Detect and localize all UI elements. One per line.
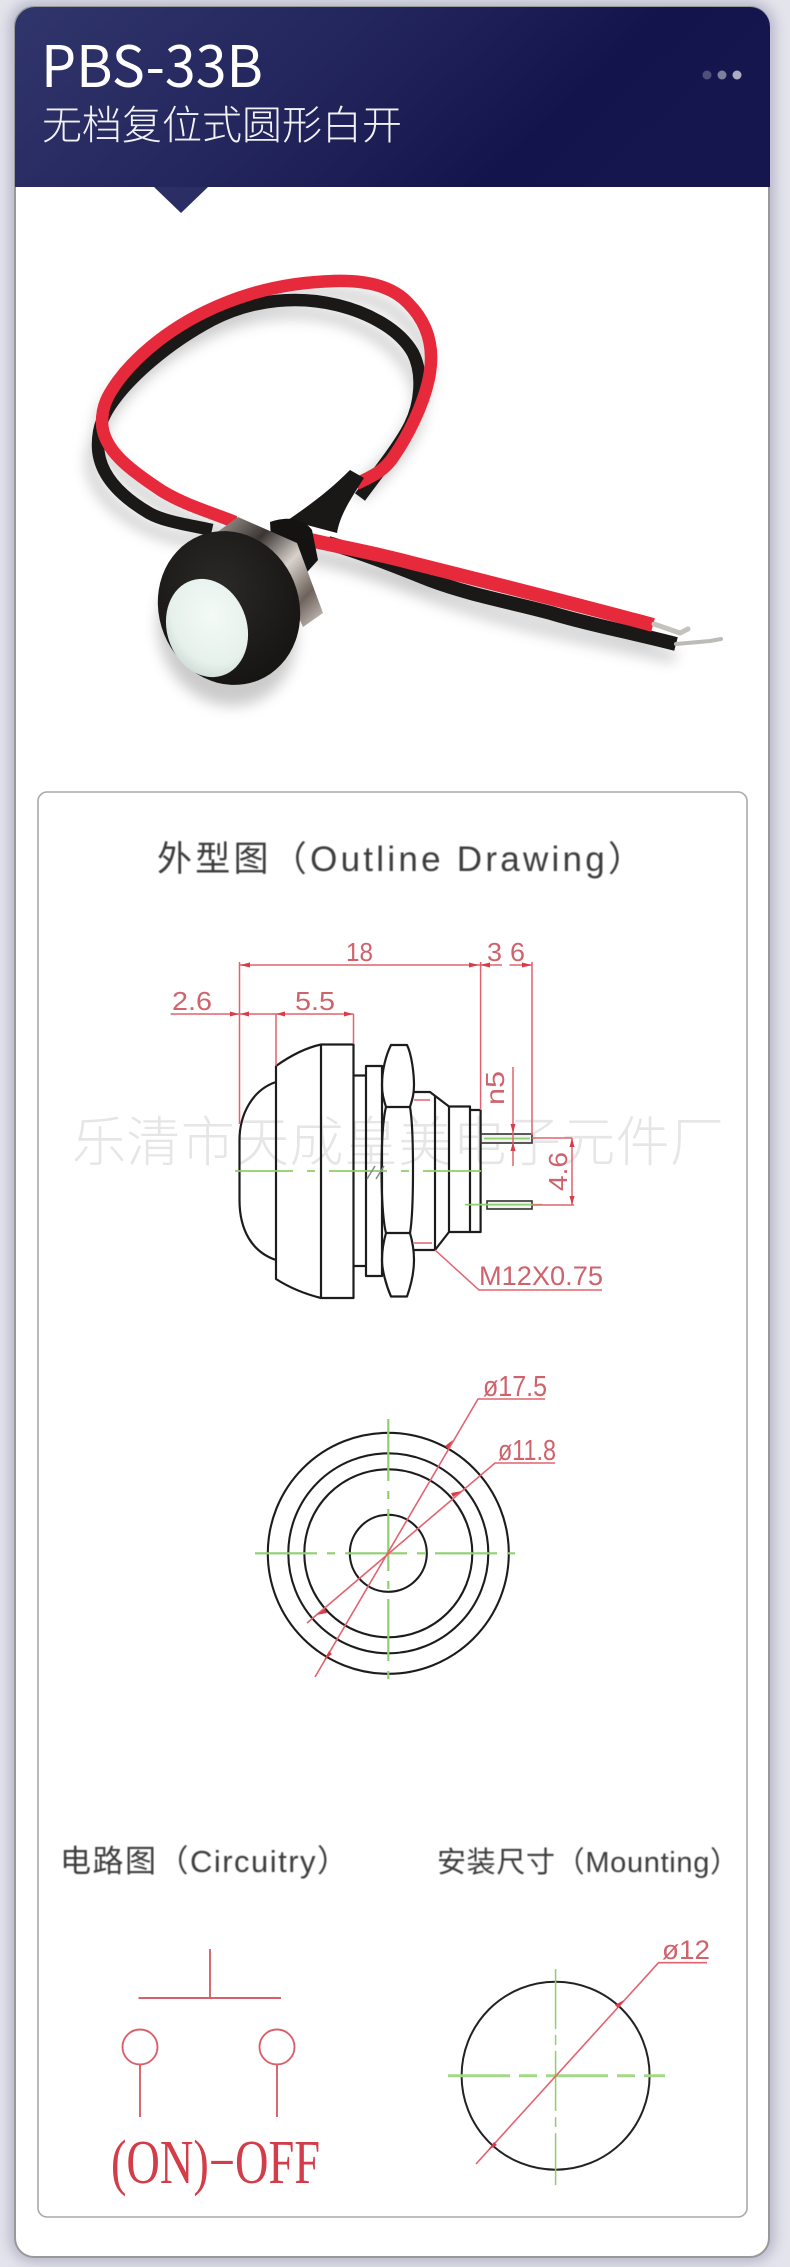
centre lines: [255, 1419, 522, 1689]
dimension labels: [172, 937, 603, 1291]
hex nut: [216, 517, 323, 627]
diameter leaders: [307, 1399, 555, 1677]
mounting hole drawing: [448, 1935, 710, 2185]
product photo: push button switch with red and black wires: [92, 281, 721, 727]
header pointer arrow: [154, 187, 208, 213]
title: PBS-33B: [41, 22, 263, 104]
diameter labels: ø17.5: [483, 1371, 547, 1403]
circuit symbol: [111, 1949, 320, 2197]
panel: technical drawings: [38, 792, 747, 2217]
wire shadow: [92, 293, 671, 727]
leader arrows: [316, 1440, 462, 1660]
dimension labels: 3: [487, 937, 502, 967]
dimension arrows: [230, 962, 574, 1205]
diameter label: ø12: [662, 1935, 710, 1965]
diameter labels: [483, 1371, 556, 1467]
switch outline: [240, 1044, 481, 1298]
dimension labels: 5.5: [295, 986, 335, 1016]
subtitle: 无档复位式圆形白开: [42, 104, 402, 148]
centre lines: [235, 1138, 542, 1205]
header dots icon: [702, 70, 742, 80]
stripped wire tips: [654, 624, 721, 644]
terminals: [481, 1134, 532, 1209]
header banner: [15, 7, 770, 213]
concentric circles: [268, 1433, 509, 1674]
dimension labels: 4.6: [543, 1152, 573, 1191]
red wire: [102, 281, 653, 625]
dimension labels: 2.6: [172, 986, 212, 1016]
dimension labels: M12X0.75: [479, 1261, 603, 1291]
dimension labels: 6: [510, 937, 525, 967]
on-off label: (ON)−OFF: [111, 2129, 320, 2197]
dimension lines: [171, 962, 602, 1290]
watermark: 乐清市天成皇美电子元件厂: [72, 1113, 724, 1173]
side view drawing: [171, 937, 603, 1298]
heading: circuitry: 电路图（Circuitry）: [60, 1844, 348, 1879]
dimension labels: 18: [346, 937, 373, 967]
dimension labels: n5: [480, 1071, 510, 1105]
black wire: [98, 300, 676, 644]
diameter leader: [476, 1963, 707, 2164]
centre lines: [448, 2074, 665, 2077]
heat-shrink sleeve: [288, 470, 364, 533]
rubber cap: [135, 509, 323, 707]
white dome: [154, 568, 260, 688]
heading: mounting: 安装尺寸（Mounting）: [437, 1846, 739, 1879]
front view drawing: [255, 1371, 556, 1689]
heading: outline drawing: 外型图（Outline Drawing）: [157, 840, 643, 879]
diameter labels: ø11.8: [498, 1435, 556, 1467]
threaded body: [270, 519, 318, 580]
